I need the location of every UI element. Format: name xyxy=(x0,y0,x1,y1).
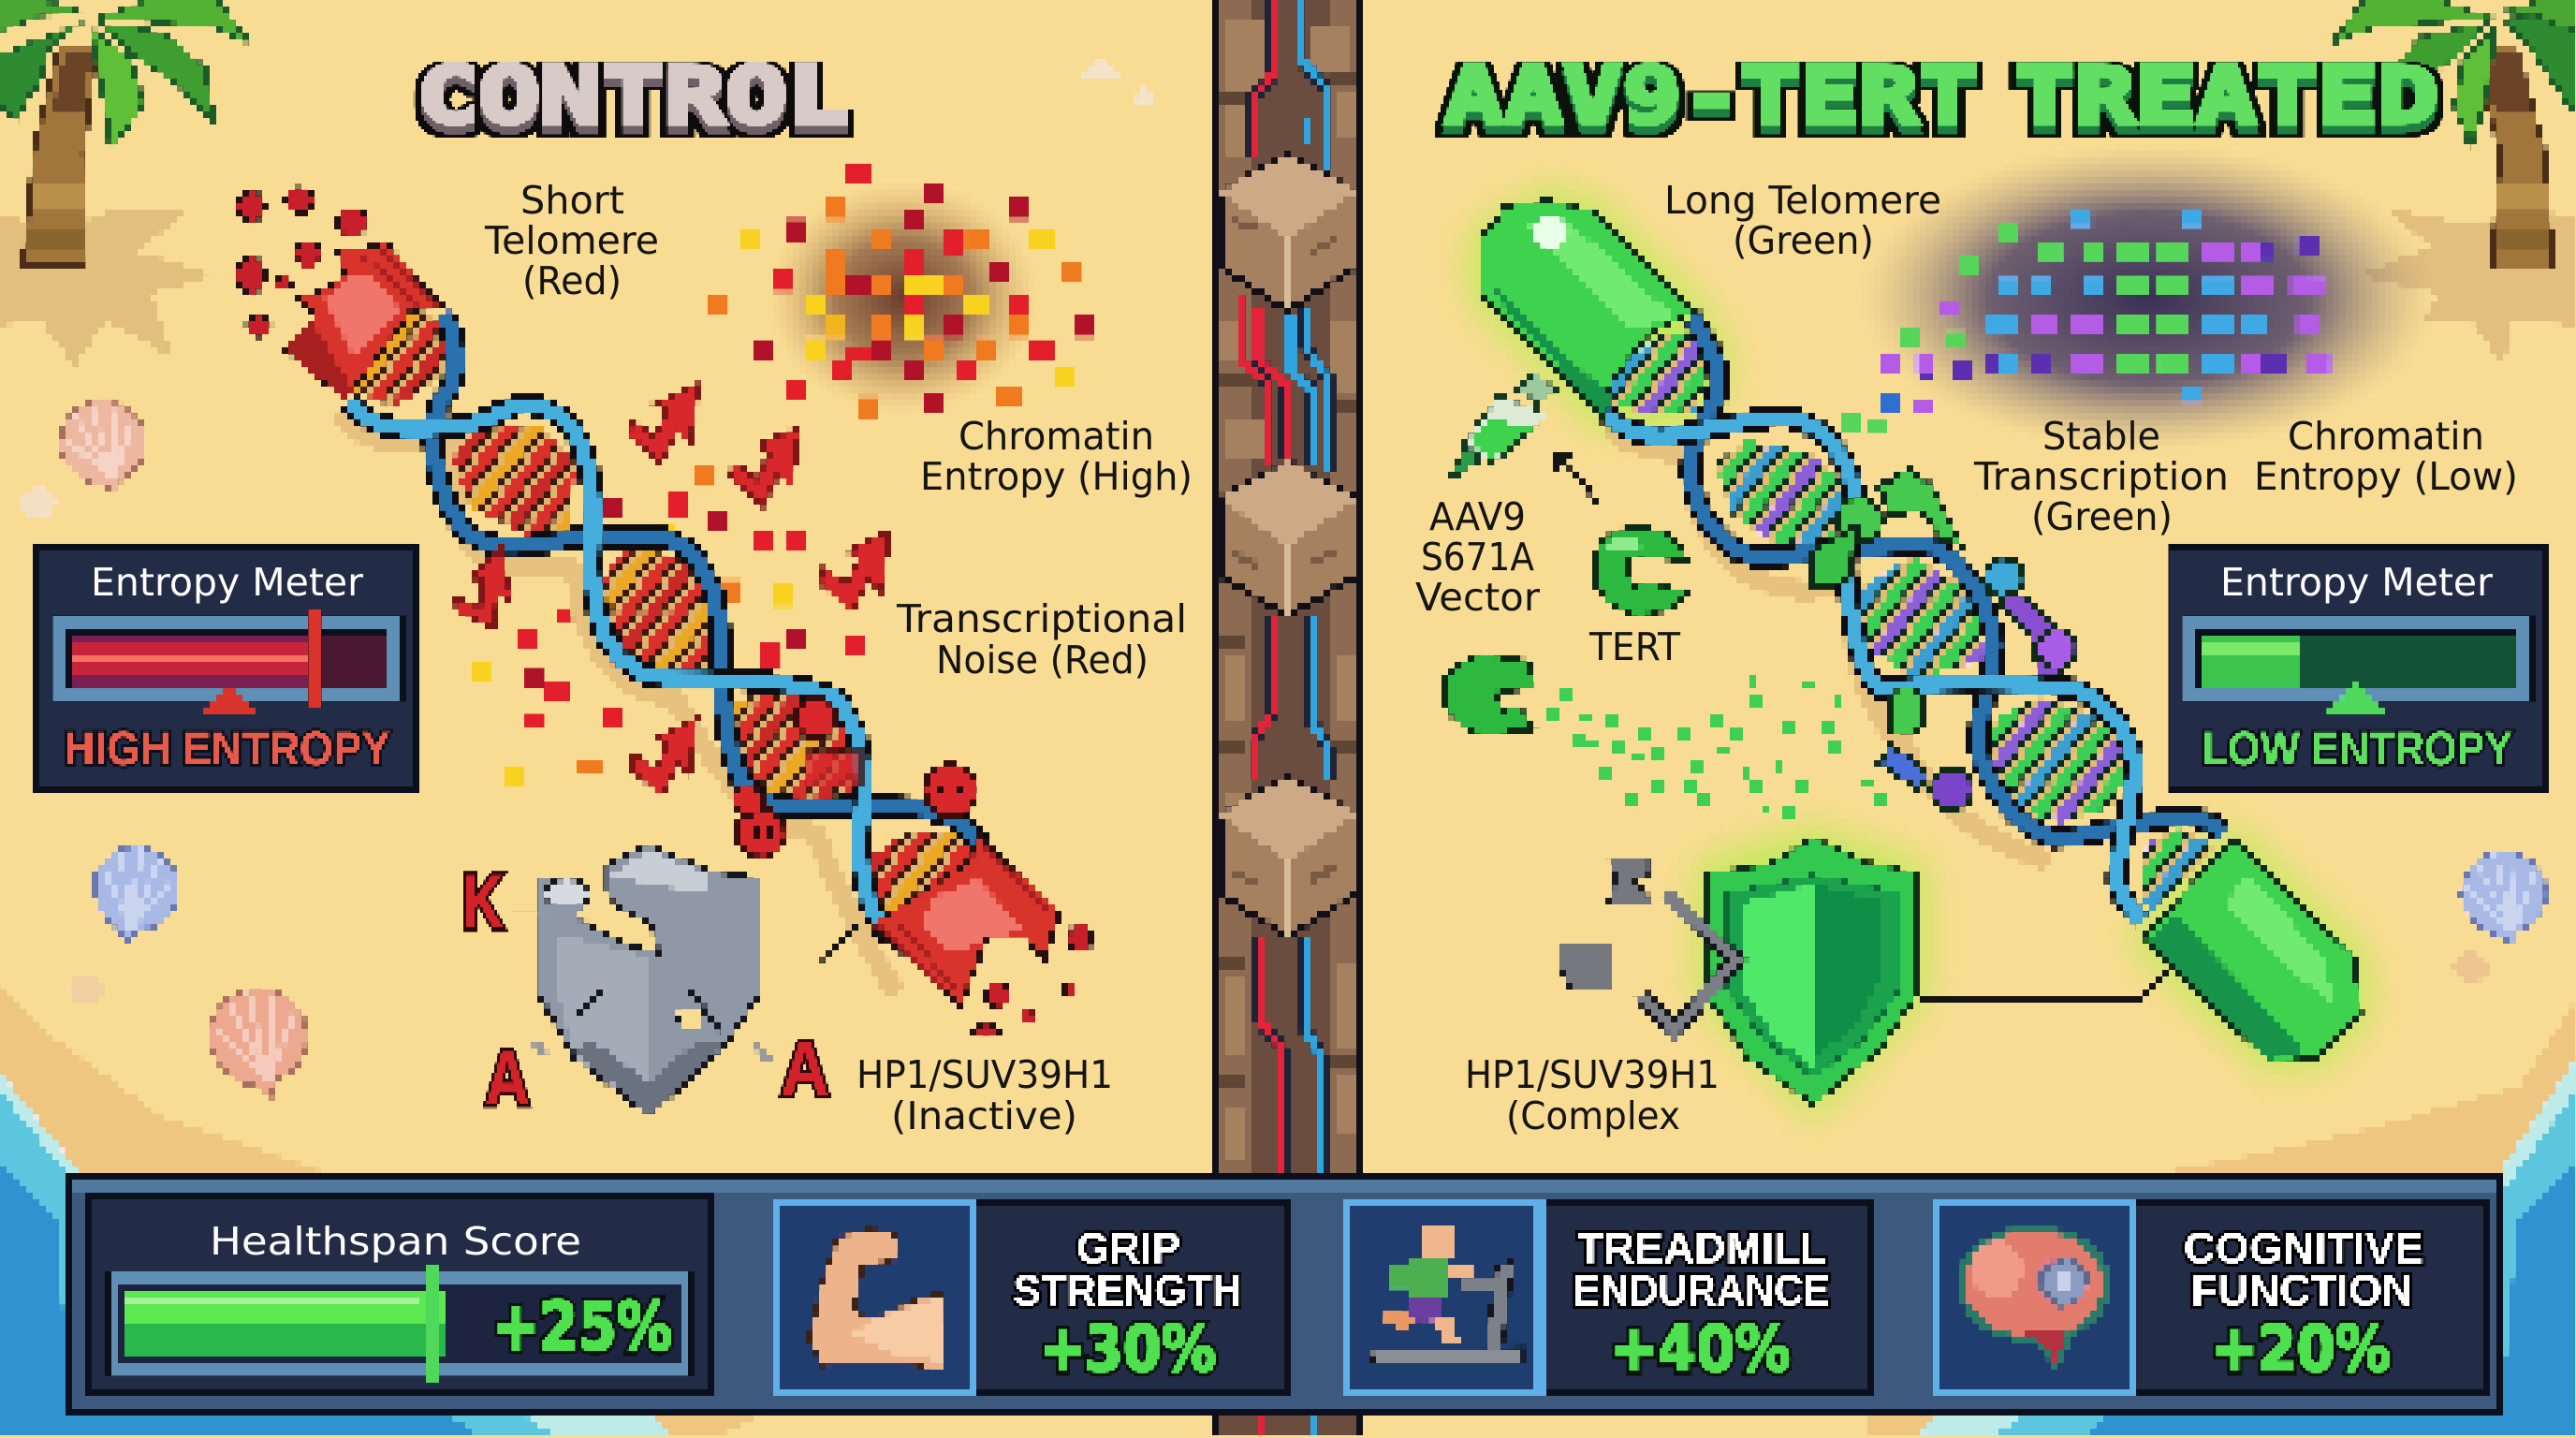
metric: cognitive function: +20% xyxy=(2212,1313,2391,1387)
label: chromatin entropy high xyxy=(920,414,1193,499)
label: AAV9 S671A vector: AAV9 xyxy=(1429,494,1526,539)
label: stable transcription: Stable xyxy=(2042,414,2160,459)
label: AAV9 S671A vector: Vector xyxy=(1415,575,1540,620)
status: low entropy: LOW ENTROPY xyxy=(2203,722,2512,775)
label: AAV9 S671A vector xyxy=(1415,494,1540,620)
label: healthspan score: Healthspan Score xyxy=(210,1219,581,1264)
metric: cognitive function: COGNITIVE xyxy=(2184,1224,2423,1272)
label: chromatin entropy low: Chromatin xyxy=(2288,414,2484,459)
label: chromatin entropy high: Chromatin xyxy=(959,414,1154,459)
label: short telomere: (Red) xyxy=(522,258,622,303)
label: stable transcription: (Green) xyxy=(2031,494,2173,539)
label: chromatin entropy high: Entropy (High) xyxy=(920,454,1193,499)
label: long telomere xyxy=(1664,178,1941,263)
label: transcriptional noise: Noise (Red) xyxy=(936,638,1149,682)
label: short telomere: Short xyxy=(520,178,624,223)
control: red jagged arrows xyxy=(442,385,889,796)
treated: entropy cloud xyxy=(1840,143,2438,452)
icon: shells and pebbles xyxy=(21,54,2555,1106)
control: connector line xyxy=(760,926,858,963)
panel: treated entropy meter xyxy=(2169,548,2546,787)
control: chromatin entropy cloud xyxy=(709,163,1095,418)
label: long telomere: (Green) xyxy=(1733,218,1874,263)
metric: grip strength xyxy=(1013,1224,1242,1387)
treated: connector line xyxy=(1922,974,2167,1001)
treated: long telomere capsule top xyxy=(1481,199,1694,419)
label: short telomere: Telomere xyxy=(484,218,659,263)
control: transcriptional noise particles xyxy=(473,466,865,789)
treated: DNA helix xyxy=(1604,316,2223,921)
central rock column with wires xyxy=(1214,0,1362,1438)
letter A left: A xyxy=(485,1036,530,1122)
label: entropy meter treated: Entropy Meter xyxy=(2220,560,2493,605)
treated: grey arrow and fragments xyxy=(1559,857,1735,1031)
treated: AAV9 syringe xyxy=(1448,372,1555,481)
title: AAV9-TERT TREATED: TREATED xyxy=(2014,50,2438,141)
treated: green particle spray xyxy=(1549,674,1885,818)
metric: treadmill endurance: ENDURANCE xyxy=(1573,1266,1830,1314)
label: chromatin entropy low: Entropy (Low) xyxy=(2254,454,2518,499)
label: AAV9 S671A vector: S671A xyxy=(1421,535,1534,580)
control: broken telomere bottom cap xyxy=(871,833,1091,1037)
label: stable transcription xyxy=(1973,414,2229,539)
metric: treadmill endurance xyxy=(1573,1224,1830,1387)
control: DNA helix xyxy=(337,312,983,992)
panel: bottom results bar xyxy=(70,1178,2502,1411)
label: stable transcription: Transcription xyxy=(1973,454,2229,499)
palm tree right xyxy=(2332,0,2576,269)
palm shadow left xyxy=(0,211,218,367)
label: HP1/SUV39H1 inactive: (Inactive) xyxy=(891,1093,1077,1138)
status: high entropy: HIGH ENTROPY xyxy=(64,722,390,775)
icon: TERT protein xyxy=(1594,527,1687,615)
label: HP1/SUV39H1 inactive xyxy=(856,1052,1113,1138)
letter A right: A xyxy=(781,1027,829,1112)
label: short telomere xyxy=(484,178,659,303)
metric: cognitive function xyxy=(2184,1224,2423,1387)
label: TERT: TERT xyxy=(1588,624,1681,669)
label: long telomere: Long Telomere xyxy=(1664,178,1941,223)
treated: long telomere capsule bottom xyxy=(2143,838,2360,1061)
treated: repair proteins on helix xyxy=(1811,468,2076,810)
label: chromatin entropy low xyxy=(2254,414,2518,499)
metric: cognitive function: FUNCTION xyxy=(2191,1266,2413,1314)
label: HP1/SUV39H1 complex xyxy=(1465,1052,1720,1138)
metric: grip strength: +30% xyxy=(1039,1313,1216,1387)
label: entropy meter control: Entropy Meter xyxy=(91,560,363,605)
letter K: K xyxy=(462,859,504,945)
icon: brain with gear xyxy=(1956,1225,2111,1370)
beach shoreline left xyxy=(0,983,768,1438)
panel: control entropy meter xyxy=(38,548,417,787)
label: HP1/SUV39H1 complex: HP1/SUV39H1 xyxy=(1465,1052,1720,1097)
label: transcriptional noise: Transcriptional xyxy=(896,596,1187,641)
control: broken telomere top cap xyxy=(237,187,444,399)
score: +25%: +25% xyxy=(493,1287,672,1366)
label: transcriptional noise xyxy=(896,596,1187,682)
beach shoreline right xyxy=(1863,999,2576,1438)
palm tree left xyxy=(0,0,251,266)
metric: grip strength: STRENGTH xyxy=(1013,1266,1242,1314)
control: damaged grey shield xyxy=(513,845,768,1116)
treated: soft glow around capsules and shield xyxy=(1481,199,2360,1105)
icon: TERT fragment xyxy=(1443,656,1534,734)
control: red binding proteins xyxy=(734,697,977,858)
metric: treadmill endurance: TREADMILL xyxy=(1577,1224,1826,1272)
label: HP1/SUV39H1 inactive: HP1/SUV39H1 xyxy=(856,1052,1113,1097)
metric: grip strength: GRIP xyxy=(1076,1224,1180,1272)
treated: green shield xyxy=(1707,838,1916,1105)
treated: small black arrow xyxy=(1551,450,1599,506)
icon: flexed arm xyxy=(809,1228,944,1371)
icon: runner on treadmill xyxy=(1370,1228,1522,1363)
label: HP1/SUV39H1 complex: (Complex xyxy=(1506,1093,1680,1138)
title: AAV9-TERT TREATED xyxy=(1444,50,2438,141)
metric: treadmill endurance: +40% xyxy=(1611,1313,1791,1387)
title: AAV9-TERT TREATED: AAV9-TERT xyxy=(1444,50,1978,141)
palm shadow right xyxy=(2356,209,2576,367)
title: CONTROL: CONTROL xyxy=(417,50,849,141)
